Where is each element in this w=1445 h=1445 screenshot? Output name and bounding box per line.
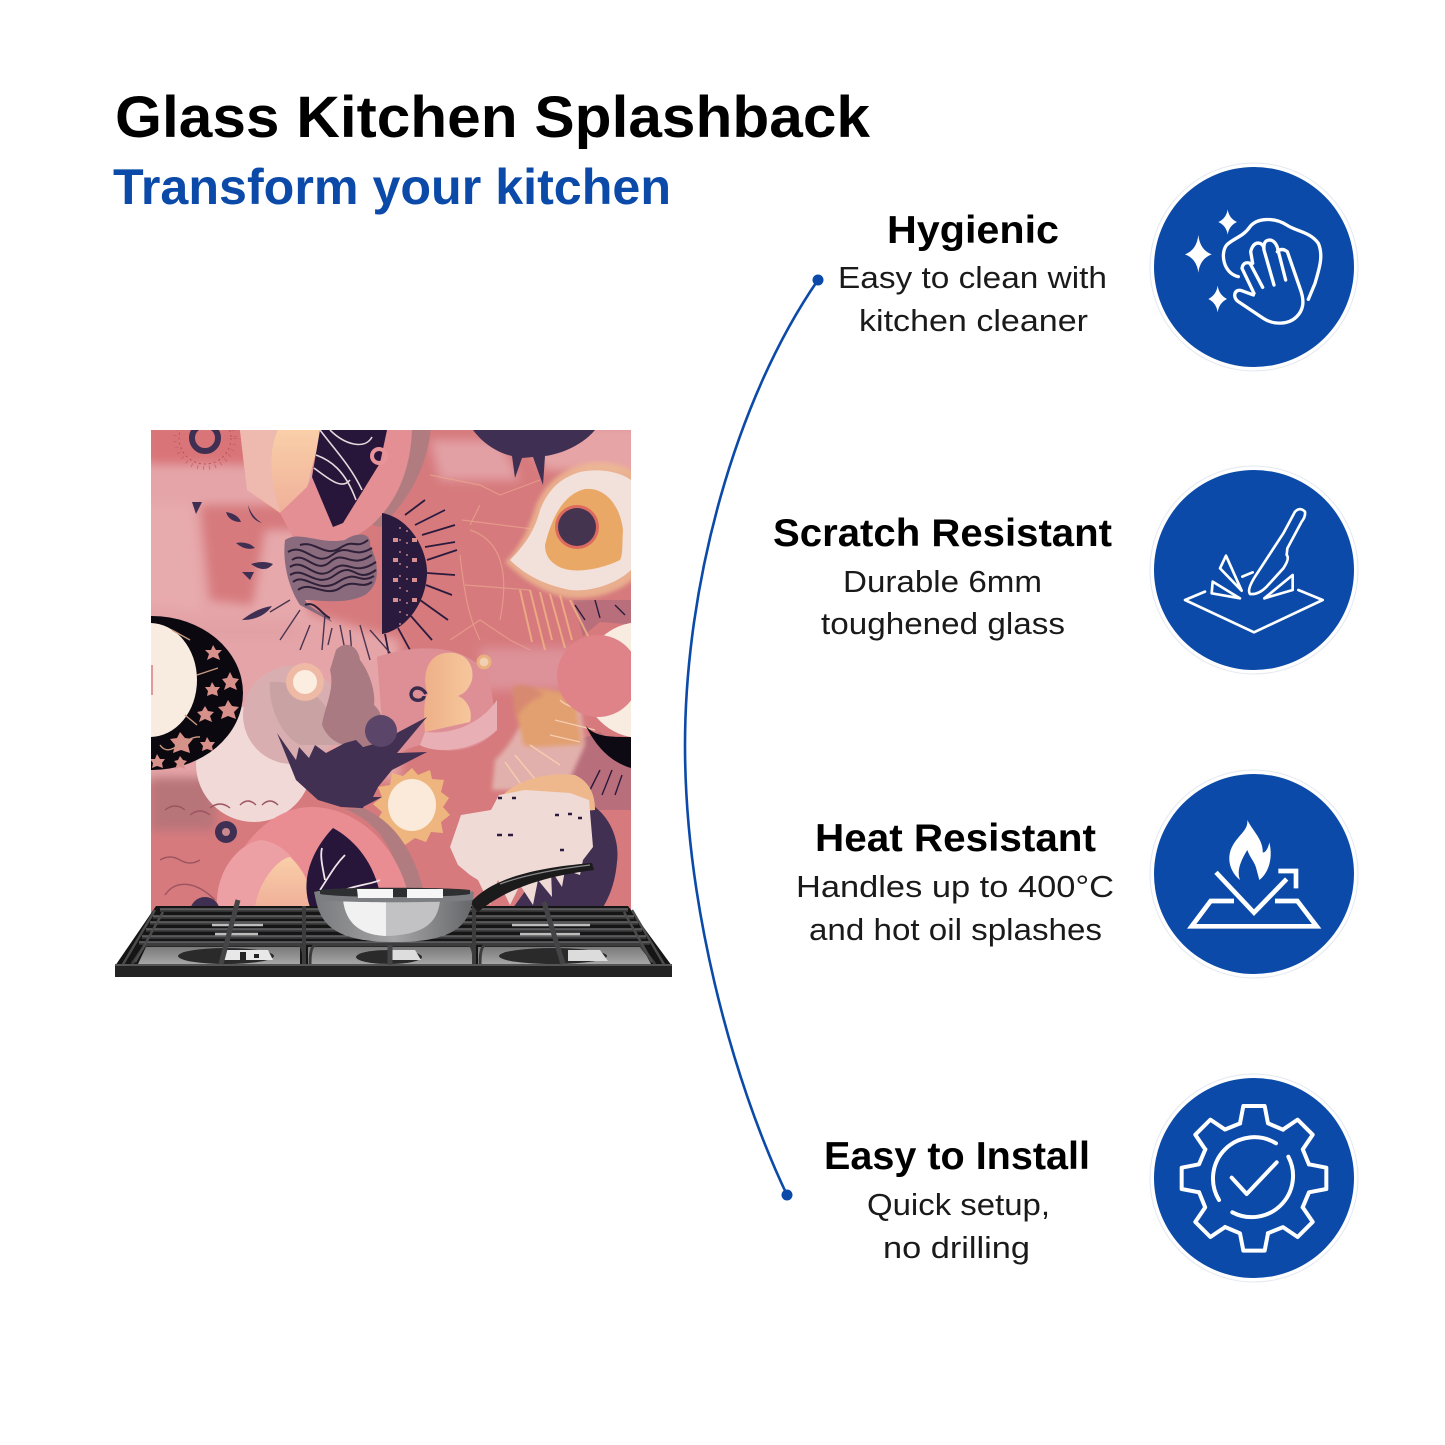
bottom pink ring and leaf <box>217 807 423 906</box>
top pink ring and leaf <box>240 425 431 547</box>
feature: hygienic: kitchen cleaner <box>859 303 1088 338</box>
feature: easy to install: Easy to Install <box>824 1135 1090 1178</box>
feature: easy to install <box>824 1135 1090 1265</box>
icon: scratch resistant knife <box>1150 466 1358 674</box>
icon: install gear with check <box>1150 1074 1358 1282</box>
feature: hygienic <box>838 209 1107 338</box>
feature: scratch resistant <box>773 512 1112 641</box>
feature: heat resistant <box>796 817 1114 947</box>
small dark circle <box>365 715 397 747</box>
icon: heat resistant flame <box>1150 770 1358 978</box>
feature: easy to install: no drilling <box>883 1230 1030 1265</box>
glass cells <box>138 947 651 964</box>
mauve right corners <box>570 600 631 810</box>
lower left circle with stars <box>151 616 243 770</box>
sun <box>373 768 450 845</box>
feature: scratch resistant: toughened glass <box>821 606 1065 641</box>
pan rim <box>314 888 474 902</box>
feature: scratch resistant: Scratch Resistant <box>773 512 1112 555</box>
feature: easy to install: Quick setup, <box>867 1187 1050 1222</box>
fan <box>492 685 600 790</box>
icon: hygienic hand wiping <box>1150 163 1358 371</box>
right black ring <box>586 726 631 768</box>
spiky strokes <box>270 600 392 660</box>
right pink wash <box>377 648 497 760</box>
peach lobes <box>424 653 473 732</box>
top dark half circle <box>473 430 595 485</box>
mauve figure <box>322 645 382 747</box>
feature: heat resistant: Heat Resistant <box>815 817 1096 860</box>
title: Glass Kitchen Splashback <box>115 85 871 150</box>
feature: hygienic: Hygienic <box>887 209 1059 252</box>
hob front lip <box>115 964 672 977</box>
mauve wash circle <box>243 666 331 764</box>
brain blob <box>284 535 377 622</box>
small dark leaves <box>192 502 273 620</box>
pan bowl <box>315 896 473 942</box>
burners <box>178 925 608 964</box>
feature: scratch resistant: Durable 6mm <box>843 564 1042 599</box>
panel: splashback artwork <box>151 430 631 914</box>
dark half circle with spikes <box>382 500 457 660</box>
hob <box>115 900 672 977</box>
connecting curve <box>685 274 824 1200</box>
support arms <box>221 900 563 965</box>
feature: heat resistant: Handles up to 400°C <box>796 869 1114 904</box>
feather blob <box>450 774 618 912</box>
right edge spikes <box>575 600 625 795</box>
right pink circle <box>557 635 639 717</box>
left small mandala and circle <box>160 800 278 906</box>
eye <box>505 462 635 650</box>
cream dot <box>286 663 324 701</box>
pale circle <box>196 706 312 822</box>
pan <box>314 863 594 942</box>
grate bars <box>122 906 665 966</box>
subtitle: Transform your kitchen <box>113 159 671 215</box>
right cream circle <box>596 622 631 737</box>
mandala top left <box>173 430 237 470</box>
feature: hygienic: Easy to clean with <box>838 260 1107 295</box>
swirl and ring <box>411 656 490 700</box>
pan handle <box>470 863 594 912</box>
feature: heat resistant: and hot oil splashes <box>809 912 1102 947</box>
hob base <box>115 906 672 977</box>
spiky crescent <box>277 717 427 815</box>
cracks <box>430 475 540 650</box>
